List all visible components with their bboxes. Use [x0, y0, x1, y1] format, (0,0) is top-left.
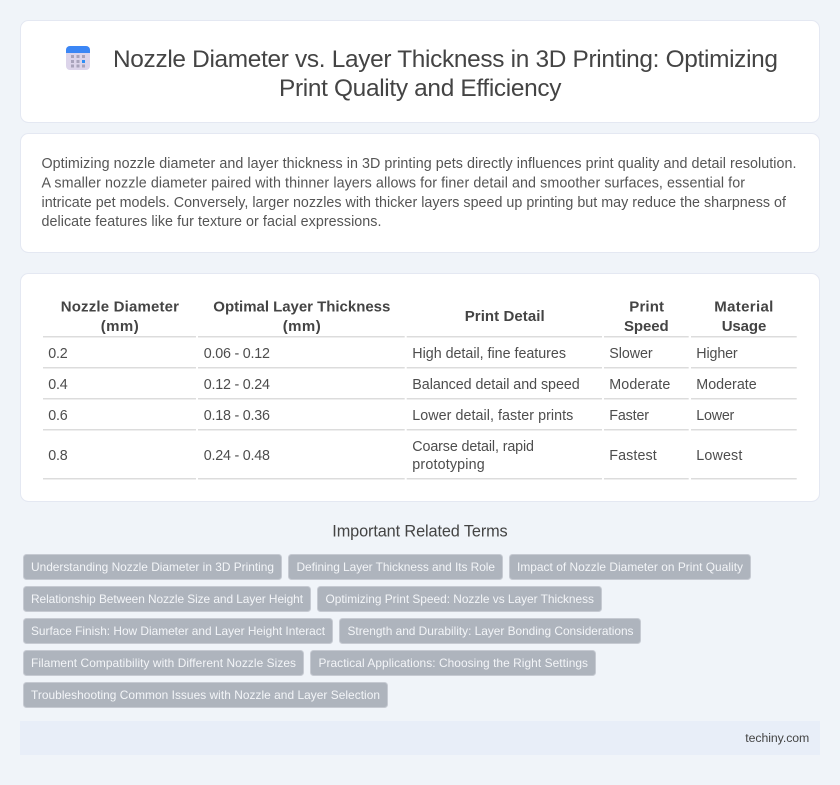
tag: Practical Applications: Choosing the Right Settings: [318, 656, 588, 670]
title: [113, 46, 778, 102]
table row: 0.4 mm: Moderate: [609, 377, 670, 393]
text block: introduction paragraph: Optimizing nozzle diameter and layer thickness in 3D printing pets directly influences print quality and detail resolution.: [42, 156, 796, 172]
table row: 0.6 mm: Faster: [609, 408, 649, 424]
tag: Understanding Nozzle Diameter in 3D Printing: [31, 560, 274, 574]
tag: [24, 618, 332, 644]
tag: [24, 650, 304, 676]
tag: [340, 618, 640, 644]
tag: [24, 586, 310, 612]
table row: 0.8 mm: [48, 439, 742, 473]
table header: Usage: [722, 318, 766, 335]
table row: 0.2 mm: 0.2: [48, 346, 68, 362]
table row: 0.6 mm: 0.18 - 0.36: [204, 408, 270, 424]
table header: Print: [629, 298, 664, 316]
table row: 0.8 mm: Fastest: [609, 448, 657, 464]
table header: [61, 298, 773, 335]
tag: Filament Compatibility with Different Nozzle Sizes: [31, 656, 296, 670]
table row: 0.4 mm: Moderate: [696, 377, 757, 393]
tag: [318, 586, 602, 612]
table header: Material: [714, 298, 773, 316]
table header: (mm): [283, 318, 321, 335]
table row: 0.2 mm: Slower: [609, 346, 653, 362]
table row: 0.6 mm: 0.6: [48, 408, 68, 424]
table row: 0.8 mm: 0.8: [48, 448, 68, 464]
text block: introduction paragraph: delicate features like fur texture or facial expressions.: [42, 214, 382, 230]
footer: [20, 721, 820, 755]
table row: 0.8 mm: Lowest: [696, 448, 742, 464]
tag: [24, 554, 282, 580]
text block: introduction paragraph: intricate pet models. Conversely, larger nozzles with thicker layers speed up printing but may reduce the sharpness of: [42, 195, 786, 211]
table header: Nozzle Diameter: [61, 298, 179, 316]
table row: 0.4 mm: 0.4: [48, 377, 68, 393]
panel: introduction: [20, 134, 820, 252]
title: Nozzle Diameter vs. Layer Thickness in 3D Printing: Optimizing: [113, 46, 778, 73]
footer: techiny.com: [745, 731, 809, 745]
table row: 0.8 mm: 0.24 - 0.48: [204, 448, 270, 464]
table row: 0.2 mm: 0.06 - 0.12: [204, 346, 270, 362]
table row: 0.8 mm: prototyping: [412, 457, 485, 473]
tag: Defining Layer Thickness and Its Role: [296, 560, 495, 574]
title: Print Quality and Efficiency: [279, 75, 562, 102]
tag: [310, 650, 596, 676]
table header: (mm): [101, 318, 139, 335]
text block: introduction paragraph: [42, 156, 796, 230]
tag: Impact of Nozzle Diameter on Print Quality: [517, 560, 743, 574]
table header: Optimal Layer Thickness: [213, 298, 390, 316]
icon: calendar grid: [66, 46, 90, 70]
table row: 0.4 mm: [48, 377, 757, 393]
table header: Speed: [624, 318, 669, 335]
header panel: [20, 20, 820, 122]
panel: comparison table: [20, 274, 820, 502]
text block: introduction paragraph: A smaller nozzle diameter paired with thinner layers allows for finer detail and smoother surfaces, essential for: [42, 176, 745, 192]
tag: [24, 682, 388, 708]
table row: 0.6 mm: [48, 408, 735, 424]
tag: Optimizing Print Speed: Nozzle vs Layer Thickness: [326, 592, 594, 606]
tag: [510, 554, 750, 580]
tag: Surface Finish: How Diameter and Layer Height Interact: [31, 624, 326, 638]
table row: 0.2 mm: Higher: [696, 346, 738, 362]
panel: related term tags: [24, 554, 750, 708]
tag: Troubleshooting Common Issues with Nozzle and Layer Selection: [31, 688, 380, 702]
tag: Relationship Between Nozzle Size and Layer Height: [31, 592, 304, 606]
table row: 0.6 mm: Lower: [696, 408, 735, 424]
table row: 0.4 mm: Balanced detail and speed: [412, 377, 580, 393]
table row: 0.4 mm: 0.12 - 0.24: [204, 377, 270, 393]
tag: Strength and Durability: Layer Bonding Considerations: [348, 624, 634, 638]
table row: 0.2 mm: High detail, fine features: [412, 346, 566, 362]
table row: 0.2 mm: [48, 346, 738, 362]
tag: [288, 554, 502, 580]
heading: important related terms: Important Related Terms: [332, 522, 508, 540]
table row: 0.6 mm: Lower detail, faster prints: [412, 408, 573, 424]
table header: Print Detail: [465, 308, 545, 325]
table row: 0.8 mm: Coarse detail, rapid: [412, 439, 534, 455]
